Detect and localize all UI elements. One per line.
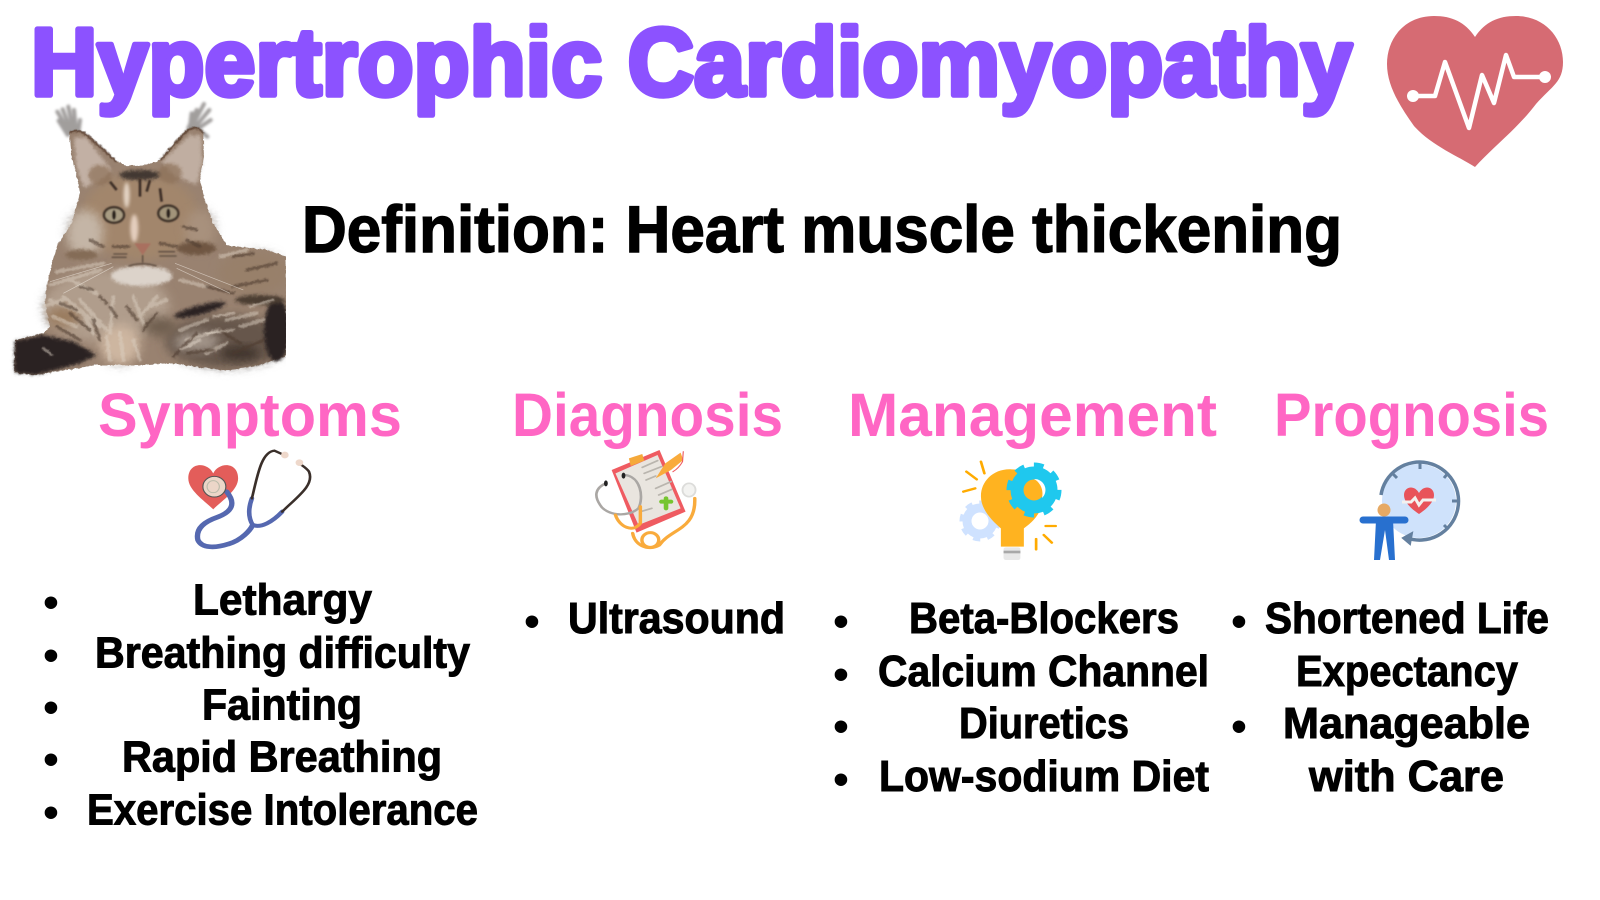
symptoms list: Breathing difficulty bbox=[95, 628, 470, 678]
prognosis list: Manageable bbox=[1283, 699, 1530, 748]
prognosis list bbox=[1231, 594, 1549, 801]
management list: • bbox=[833, 702, 849, 751]
symptoms list: Rapid Breathing bbox=[122, 732, 442, 782]
management list: • bbox=[833, 755, 849, 804]
prognosis list: Expectancy bbox=[1296, 647, 1518, 696]
heading: diagnosis: Diagnosis bbox=[512, 381, 783, 449]
panel: management bbox=[833, 381, 1217, 804]
management list: • bbox=[833, 597, 849, 646]
diagnosis list: • bbox=[524, 597, 540, 646]
symptoms list: Lethargy bbox=[193, 576, 373, 624]
symptoms list: Fainting bbox=[202, 680, 362, 730]
title: Hypertrophic Cardiomyopathy bbox=[31, 9, 1352, 116]
management list: • bbox=[833, 650, 849, 699]
heading: prognosis: Prognosis bbox=[1274, 381, 1549, 449]
symptoms list bbox=[43, 576, 478, 837]
heading: symptoms: Symptoms bbox=[98, 381, 402, 449]
symptoms list: • bbox=[43, 631, 59, 680]
icon: stethoscope and heart bbox=[188, 451, 310, 547]
heading: management: Management bbox=[848, 381, 1217, 449]
panel: diagnosis bbox=[512, 381, 785, 646]
cat photo illustration bbox=[14, 104, 289, 375]
prognosis list: • bbox=[1231, 597, 1247, 646]
management list: Low-sodium Diet bbox=[879, 752, 1209, 801]
panel: prognosis bbox=[1231, 381, 1549, 801]
prognosis list: • bbox=[1231, 702, 1247, 751]
prognosis list: with Care bbox=[1308, 752, 1504, 801]
management list: Beta-Blockers bbox=[909, 594, 1179, 643]
symptoms list: • bbox=[43, 735, 59, 784]
icon: light bulb and gears bbox=[962, 462, 1058, 560]
management list bbox=[833, 594, 1209, 804]
prognosis list: Shortened Life bbox=[1265, 594, 1549, 643]
management list: Calcium Channel bbox=[878, 647, 1209, 696]
diagnosis list: Ultrasound bbox=[568, 594, 785, 643]
symptoms list: • bbox=[43, 683, 59, 732]
symptoms list: Exercise Intolerance bbox=[87, 786, 478, 834]
icon: heart with pulse line bbox=[1387, 16, 1563, 167]
icon: person and heart clock bbox=[1363, 462, 1459, 560]
panel: symptoms bbox=[43, 381, 478, 837]
management list: Diuretics bbox=[959, 699, 1129, 748]
symptoms list: • bbox=[43, 788, 59, 837]
definition: Definition: Heart muscle thickening bbox=[302, 192, 1342, 266]
symptoms list: • bbox=[43, 578, 59, 627]
icon: clipboard and stethoscope bbox=[596, 450, 696, 548]
